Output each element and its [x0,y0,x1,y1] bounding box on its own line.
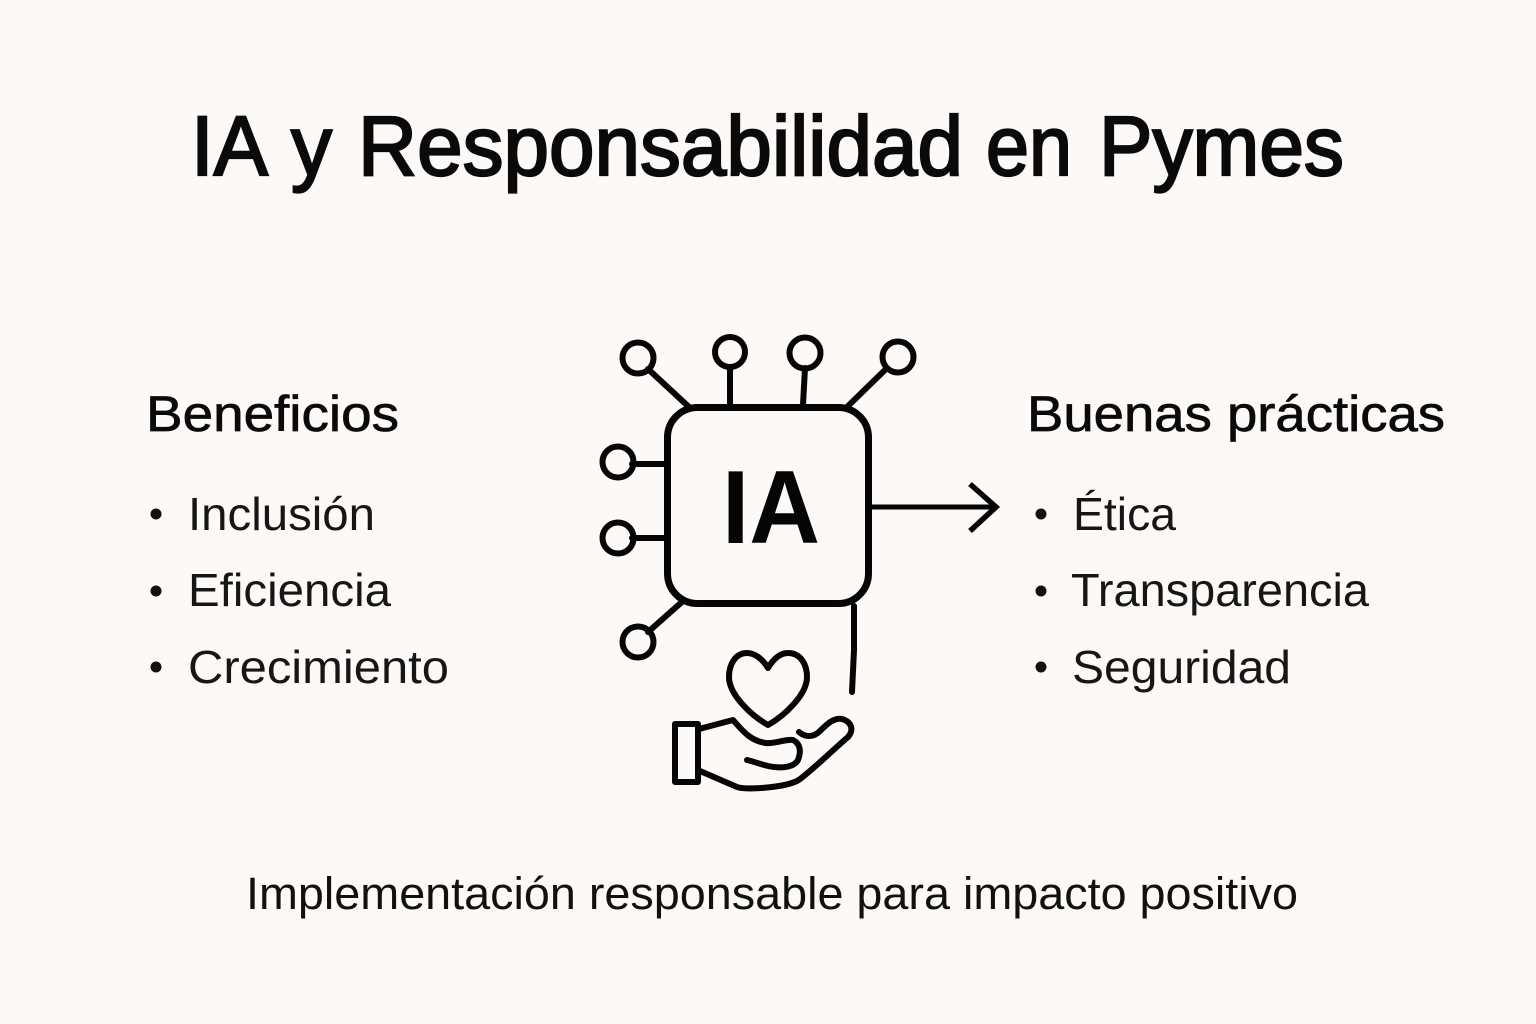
panel: beneficios [146,386,449,693]
title: Responsabilidad [358,99,963,193]
panel: buenas prácticas [1027,386,1445,693]
list item: ética: Ética [1073,488,1176,540]
heading: buenas prácticas: Buenas prácticas [1027,386,1445,442]
title: y [291,99,332,193]
chip label: IA [722,450,820,566]
arrow: IA to buenas prácticas [872,484,996,531]
title: IA [191,99,268,193]
chip body [668,408,868,604]
icon: hand holding heart [675,653,851,788]
title [191,99,1344,193]
title: Pymes [1099,99,1344,193]
chip connectors and nodes [602,337,914,692]
heading: beneficios: Beneficios [146,386,399,442]
icon: IA chip with nodes [602,337,914,692]
list item: crecimiento: Crecimiento [188,641,449,693]
list item: seguridad: Seguridad [1072,641,1291,693]
list item: inclusión: Inclusión [188,488,375,540]
footer caption: Implementación responsable para impacto positivo [246,868,1298,919]
list item: transparencia: Transparencia [1071,564,1369,616]
heart [729,653,807,725]
title: en [986,99,1072,193]
list item: eficiencia: Eficiencia [188,564,391,616]
hand [675,719,851,788]
